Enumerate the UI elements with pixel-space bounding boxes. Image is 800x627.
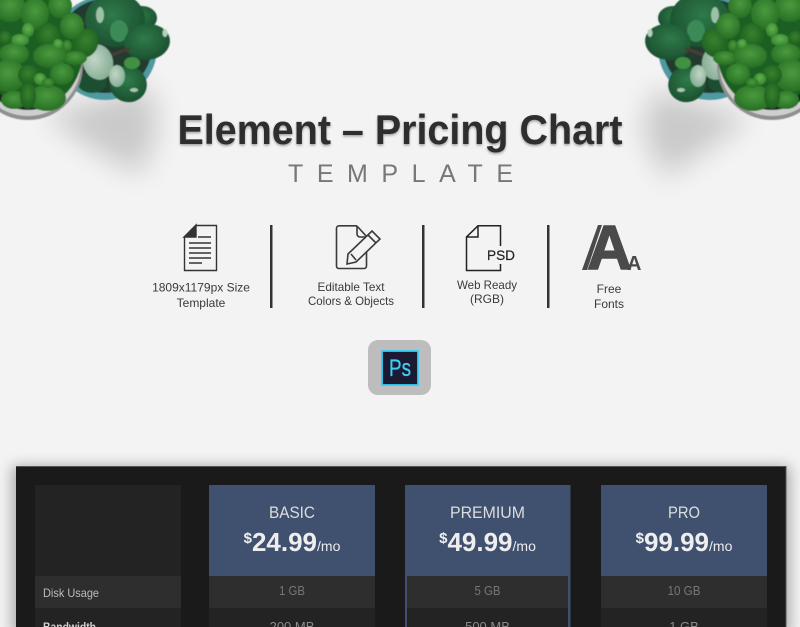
column: basic bbox=[209, 485, 375, 627]
icon: PSD file bbox=[466, 226, 500, 270]
column: features bbox=[35, 485, 181, 627]
column: pro bbox=[601, 485, 767, 627]
column: premium: PREMIUM bbox=[450, 503, 525, 522]
panel: pricing table bbox=[16, 466, 786, 627]
column: pro: 10 GB bbox=[668, 583, 700, 598]
column: basic: 1 GB bbox=[279, 583, 305, 598]
column: pro: /mo bbox=[709, 538, 733, 554]
label: 1809x1179px Size bbox=[152, 280, 250, 294]
title: Element – Pricing Chart bbox=[178, 106, 623, 153]
column: premium: 49.99 bbox=[447, 527, 513, 557]
icon label: PSD bbox=[487, 247, 515, 263]
icon: Photoshop badge bbox=[368, 340, 431, 395]
feature: size template bbox=[152, 225, 250, 310]
column: pro: 99.99 bbox=[644, 527, 709, 557]
label: Colors & Objects bbox=[308, 294, 394, 308]
column: pro: PRO bbox=[668, 503, 700, 522]
icon: fonts: A bbox=[587, 214, 632, 283]
column: basic: BASIC bbox=[269, 503, 315, 522]
icon: fonts: A bbox=[627, 253, 641, 275]
column: basic: $ bbox=[244, 530, 253, 547]
column: premium: /mo bbox=[513, 538, 536, 554]
icon: right plants bbox=[643, 0, 800, 120]
label bbox=[308, 280, 394, 308]
column: premium: $ bbox=[439, 530, 448, 547]
shadow: left plant bbox=[45, 85, 158, 175]
column: basic: /mo bbox=[317, 538, 341, 554]
icon: left plants bbox=[0, 0, 172, 120]
column: pro: $ bbox=[636, 530, 645, 547]
column: basic: 24.99 bbox=[252, 527, 317, 557]
column: features: Disk Usage bbox=[43, 586, 99, 600]
label: Template bbox=[177, 296, 226, 310]
column: premium bbox=[405, 485, 570, 627]
subtitle: TEMPLATE bbox=[288, 160, 513, 188]
feature: web ready bbox=[457, 226, 517, 306]
label bbox=[457, 278, 517, 306]
shadow: right plant bbox=[642, 90, 750, 178]
icon: document bbox=[184, 225, 216, 270]
feature: free fonts bbox=[582, 214, 641, 311]
label: Web Ready bbox=[457, 278, 517, 292]
icon: edit document bbox=[336, 226, 380, 268]
panel shadow bbox=[12, 466, 790, 627]
label: Fonts bbox=[594, 297, 624, 311]
icon: Photoshop badge: Ps bbox=[389, 355, 411, 382]
label: Editable Text bbox=[318, 280, 385, 294]
label: Free bbox=[597, 282, 622, 296]
label: (RGB) bbox=[470, 292, 504, 306]
feature: editable text bbox=[308, 226, 394, 308]
column: premium: 5 GB bbox=[474, 583, 500, 598]
